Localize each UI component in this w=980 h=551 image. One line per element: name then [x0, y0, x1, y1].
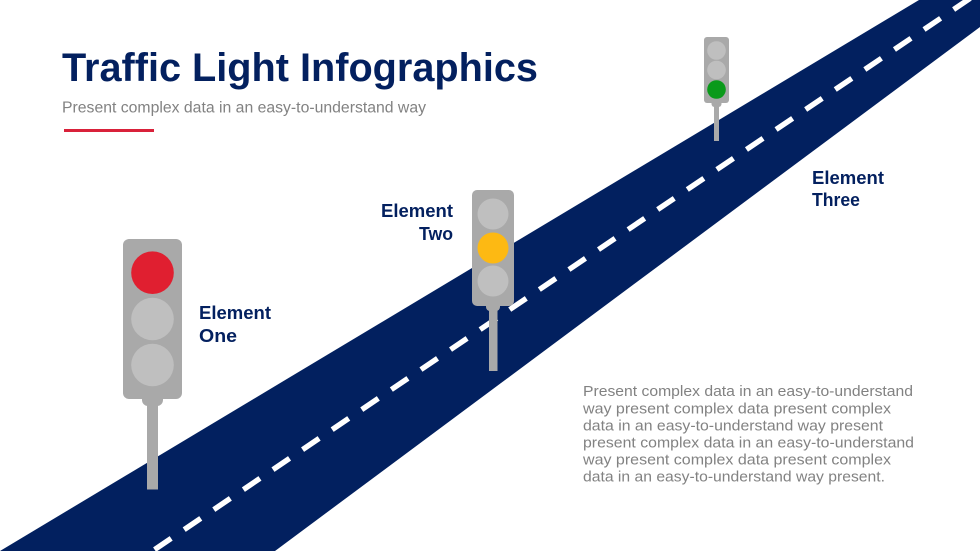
body text: present complex data in an easy-to-understand — [583, 435, 914, 452]
label: element one: One — [199, 325, 237, 346]
body text: Present complex data in an easy-to-understand — [583, 383, 913, 400]
green light — [707, 80, 726, 99]
label: element one — [199, 302, 271, 346]
subtitle: Present complex data in an easy-to-understand way — [62, 100, 426, 116]
traffic light one — [123, 239, 182, 490]
traffic light three — [704, 37, 729, 141]
body text: data in an easy-to-understand way present. — [583, 468, 885, 486]
label: element three: Three — [812, 189, 860, 210]
label: element two: Element — [381, 200, 453, 221]
title accent line — [64, 129, 154, 132]
amber light — [478, 232, 508, 264]
label: element two: Two — [419, 223, 453, 244]
label: element three — [812, 167, 884, 210]
label: element three: Element — [812, 167, 884, 188]
red light — [131, 251, 174, 294]
label: element two — [381, 200, 453, 244]
body text: way present complex data present complex — [582, 451, 891, 468]
title: Traffic Light Infographics — [62, 46, 538, 90]
body text: data in an easy-to-understand way present — [583, 418, 884, 435]
traffic light two — [472, 190, 514, 371]
body text — [582, 383, 914, 486]
label: element one: Element — [199, 302, 271, 323]
body text: way present complex data present complex — [582, 400, 891, 417]
